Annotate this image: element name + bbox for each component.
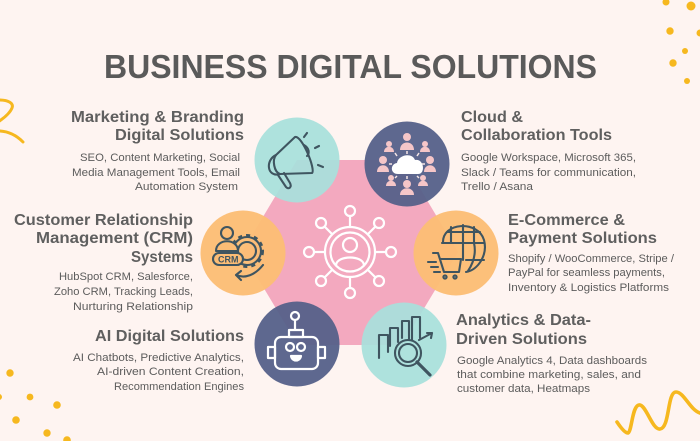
AI text: AI Chatbots, Predictive Analytics, — [73, 352, 244, 364]
marketing text: SEO, Content Marketing, Social — [80, 152, 240, 164]
CRM heading — [14, 212, 193, 266]
decorative dots bottom left — [0, 369, 71, 441]
panel: CRM — [14, 210, 286, 313]
AI text: AI-driven Content Creation, — [97, 366, 244, 378]
analytics text: that combine marketing, sales, and — [457, 369, 641, 381]
CRM text: HubSpot CRM, Salesforce, — [59, 271, 193, 283]
AI heading: AI Digital Solutions — [95, 328, 244, 345]
cloud text — [461, 152, 636, 193]
icon: globe and cart — [428, 225, 485, 279]
cloud text: Google Workspace, Microsoft 365, — [461, 152, 636, 164]
analytics heading: Analytics & Data- — [456, 312, 591, 329]
e-commerce text: Inventory & Logistics Platforms — [508, 282, 669, 294]
analytics heading: Driven Solutions — [456, 331, 587, 348]
e-commerce heading: Payment Solutions — [508, 230, 657, 247]
decorative dots top right — [662, 0, 700, 84]
cloud heading — [461, 109, 612, 144]
e-commerce circle — [414, 210, 498, 296]
cloud heading: Collaboration Tools — [461, 127, 612, 144]
AI text — [73, 352, 244, 393]
panel: cloud — [364, 109, 636, 206]
e-commerce text: Shopify / WooCommerce, Stripe / — [508, 253, 674, 265]
CRM text: Nurturing Relationship — [73, 301, 193, 313]
marketing text: Automation System — [135, 181, 238, 193]
central hexagon — [242, 160, 458, 345]
marketing heading: Digital Solutions — [115, 127, 244, 144]
icon: cloud and people — [377, 133, 436, 195]
icon: megaphone — [269, 133, 323, 188]
CRM text — [54, 271, 193, 313]
e-commerce heading: E-Commerce & — [508, 212, 625, 229]
e-commerce text: PayPal for seamless payments, — [508, 267, 665, 279]
cloud heading: Cloud & — [461, 109, 523, 126]
analytics heading — [456, 312, 591, 348]
marketing text — [72, 152, 240, 193]
AI circle — [254, 302, 340, 386]
panel: e-commerce — [414, 210, 674, 296]
analytics text: Google Analytics 4, Data dashboards — [457, 355, 647, 367]
CRM heading: Management (CRM) — [36, 230, 193, 247]
squiggle right — [617, 392, 700, 433]
CRM label: CRM — [218, 254, 238, 264]
e-commerce text — [508, 253, 674, 294]
title: BUSINESS DIGITAL SOLUTIONS — [104, 48, 597, 85]
cloud text: Trello / Asana — [461, 181, 533, 193]
e-commerce heading — [508, 212, 657, 247]
squiggle left — [0, 100, 23, 142]
cloud text: Slack / Teams for communication, — [461, 167, 636, 179]
marketing text: Media Management Tools, Email — [72, 167, 240, 179]
central network icon — [304, 206, 396, 298]
marketing heading — [71, 109, 244, 144]
panel: AI — [73, 302, 340, 393]
CRM heading: Customer Relationship — [14, 212, 193, 229]
marketing circle — [254, 118, 340, 202]
panel: analytics — [362, 302, 647, 395]
icon: CRM gear — [213, 227, 263, 280]
cloud circle — [364, 122, 450, 206]
panel: marketing — [71, 109, 340, 202]
analytics circle — [362, 302, 446, 388]
CRM circle — [200, 210, 286, 296]
analytics text — [457, 355, 647, 395]
marketing heading: Marketing & Branding — [71, 109, 244, 126]
CRM text: Zoho CRM, Tracking Leads, — [54, 286, 193, 298]
AI text: Recommendation Engines — [114, 381, 244, 393]
icon: robot — [268, 312, 325, 369]
icon: bar chart and magnifier — [379, 317, 432, 375]
analytics text: customer data, Heatmaps — [457, 383, 590, 395]
CRM heading: Systems — [131, 249, 193, 266]
